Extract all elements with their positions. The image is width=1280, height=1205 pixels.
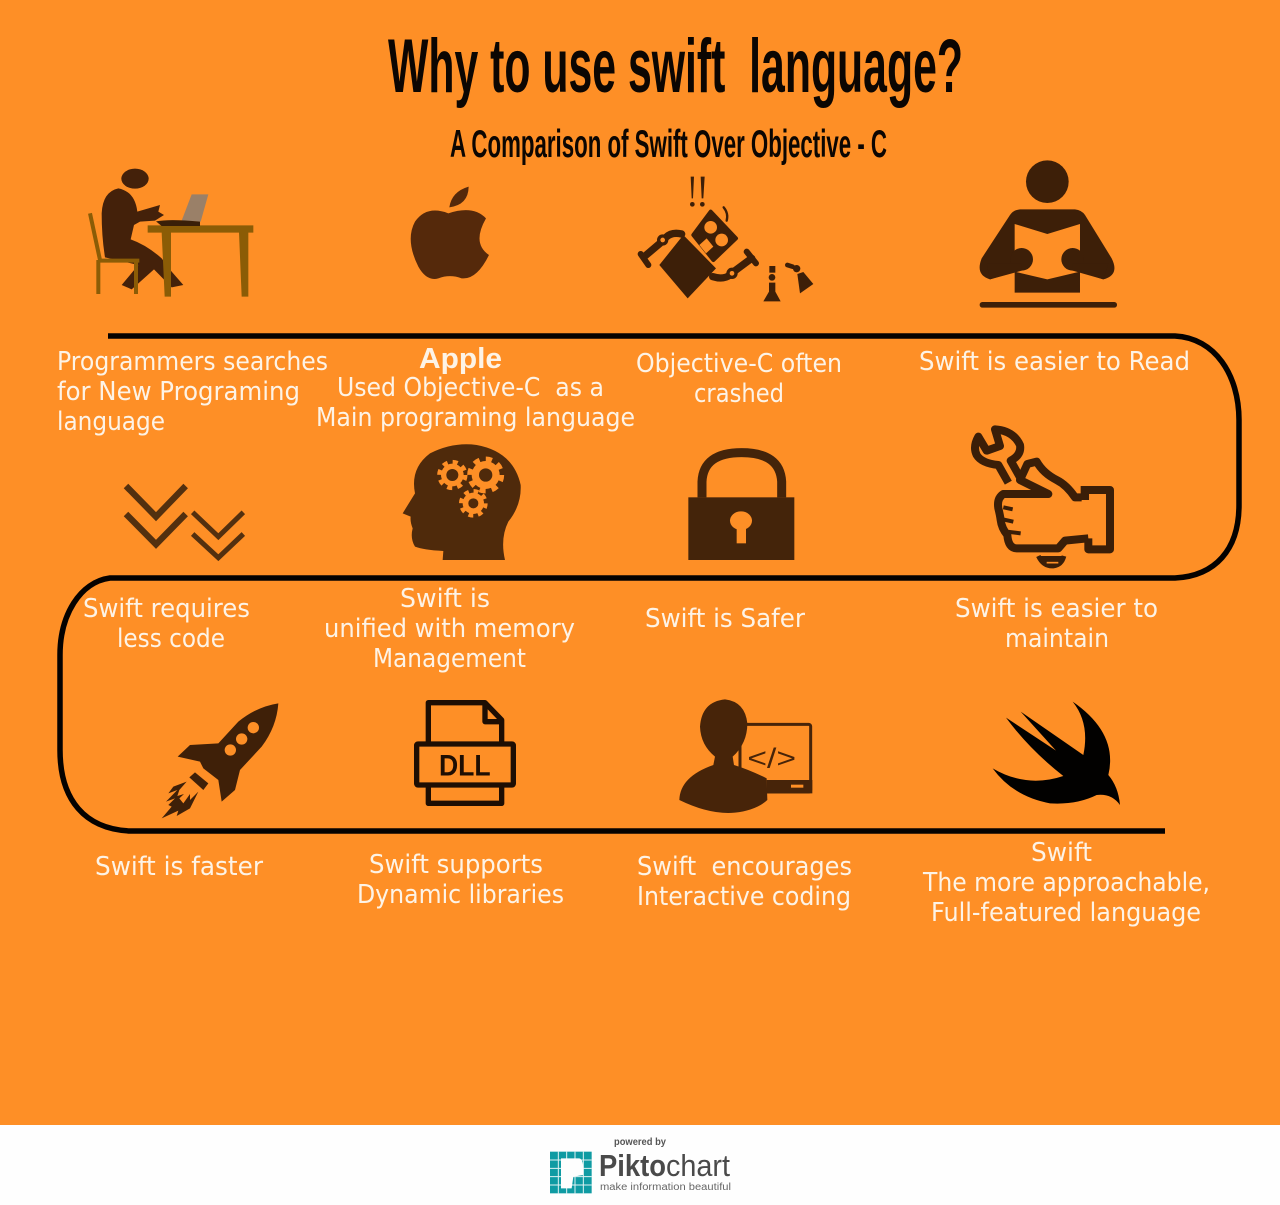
text: easier to maintain — [955, 594, 1158, 654]
footer: piktochart branding — [0, 1125, 1280, 1205]
text: swift is faster: Swift is faster — [95, 852, 263, 882]
text: unified memory management: unified with memory — [324, 614, 575, 644]
text: objective-c crashed: Objective-C often — [636, 349, 842, 379]
footer: piktochart branding: powered by — [614, 1137, 666, 1148]
text: apple main language: Used Objective-C as a — [337, 373, 604, 403]
text: requires less code: Swift requires — [83, 594, 250, 624]
text: apple main language: Apple — [419, 343, 502, 375]
icon: programmer at desk — [90, 169, 253, 297]
icon: rocket — [162, 703, 278, 818]
icon: person reading — [980, 160, 1117, 308]
text: dynamic libraries: Dynamic libraries — [357, 880, 564, 910]
footer: piktochart branding: make information beautiful — [600, 1182, 731, 1193]
text: programmers searches: Programmers searches — [57, 347, 328, 377]
text: easier to read: Swift is easier to Read — [919, 347, 1190, 377]
text: interactive coding: Interactive coding — [637, 882, 851, 912]
icon: crashed robot — [641, 177, 813, 301]
text: unified memory management — [324, 584, 575, 674]
icon: swift bird logo — [993, 702, 1120, 805]
text: unified memory management: Swift is — [400, 584, 490, 614]
text: interactive coding: Swift encourages — [637, 852, 852, 882]
text: easier to maintain: Swift is easier to — [955, 594, 1158, 624]
icon: coder with screen: </> — [747, 742, 796, 773]
icon: dll file — [417, 703, 513, 803]
icon: coder with screen — [679, 699, 812, 813]
text: dynamic libraries — [357, 850, 564, 910]
text: apple main language: Main programing language — [316, 403, 635, 433]
text: approachable language — [922, 838, 1210, 928]
icon: dll file: DLL — [439, 750, 491, 783]
text: interactive coding — [637, 852, 852, 912]
text: programmers searches — [57, 347, 328, 437]
text: objective-c crashed: crashed — [694, 379, 784, 409]
text: requires less code: less code — [117, 624, 225, 654]
footer: piktochart branding: Pikto — [599, 1148, 666, 1183]
text: approachable language: Full-featured language — [931, 898, 1201, 928]
text: dynamic libraries: Swift supports — [369, 850, 543, 880]
text: requires less code — [83, 594, 250, 654]
text: swift is safer: Swift is Safer — [645, 604, 805, 634]
footer: piktochart branding: chart — [666, 1148, 730, 1183]
text: approachable language: Swift — [1031, 838, 1092, 868]
subtitle: A Comparison of Swift Over Objective - C — [450, 123, 887, 166]
text: objective-c crashed — [636, 349, 842, 409]
text: programmers searches: language — [57, 407, 165, 437]
icon: head with gears — [403, 444, 521, 560]
text: approachable language: The more approachable, — [922, 868, 1210, 898]
text: apple main language — [316, 343, 635, 433]
text: programmers searches: for New Programing — [57, 377, 300, 407]
winding timeline path — [60, 336, 1239, 831]
text: easier to maintain: maintain — [1005, 624, 1109, 654]
icon: double chevrons — [126, 486, 243, 558]
icon: hand holding wrench — [975, 429, 1110, 566]
icon: apple logo — [411, 187, 489, 279]
text: unified memory management: Management — [373, 644, 526, 674]
icon: padlock — [688, 453, 794, 560]
